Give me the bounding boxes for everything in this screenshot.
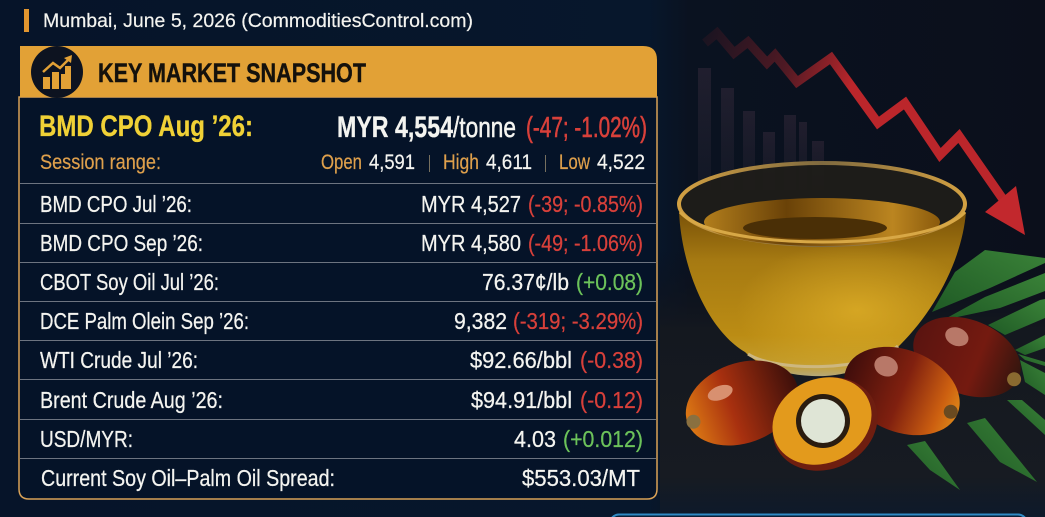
row: BMD CPO Aug '26 (39, 110, 647, 144)
row: USD/MYR: (+0.012) (563, 426, 643, 452)
accent bar (24, 9, 29, 32)
row: DCE Palm Olein: (-319; -3.29%) (513, 308, 643, 334)
row: BMD CPO Sep '26: (-49; -1.06%) (528, 230, 643, 256)
palm fruit: left (673, 346, 810, 461)
row: CBOT Soy Oil: CBOT Soy Oil Jul ’26: (40, 269, 219, 295)
row: CBOT Soy Oil (40, 269, 643, 295)
row: BMD CPO Jul '26: BMD CPO Jul ’26: (40, 191, 192, 217)
row: BMD CPO Jul '26: (-39; -0.85%) (528, 191, 643, 217)
row: Brent Crude: (-0.12) (580, 387, 643, 413)
palm fruit: back right (901, 302, 1036, 413)
row: session range: 4,591 (369, 150, 415, 174)
panel body (19, 97, 657, 499)
palm fruit: middle (831, 331, 973, 451)
row: session range: 4,522 (597, 150, 645, 174)
row: CBOT Soy Oil: (+0.08) (576, 269, 643, 295)
row: BMD CPO Aug '26: (-47; -1.02%) (526, 112, 647, 144)
row: session range: Session range: (40, 150, 161, 174)
next panel top edge (610, 514, 1027, 517)
row: soy oil-palm oil spread: $553.03/MT (522, 465, 640, 491)
row: USD/MYR (40, 426, 643, 452)
row: BMD CPO Jul '26 (40, 191, 643, 217)
row: session range: 4,611 (486, 150, 532, 174)
row: soy oil-palm oil spread (41, 465, 640, 491)
row: session range: Low (559, 150, 590, 174)
row: WTI Crude: (-0.38) (580, 347, 643, 373)
row: Brent Crude (40, 387, 643, 413)
row: BMD CPO Jul '26: MYR 4,527 (421, 191, 521, 217)
row: USD/MYR: USD/MYR: (40, 426, 133, 452)
heading: KEY MARKET SNAPSHOT (98, 58, 366, 88)
row: session range: High (443, 150, 479, 174)
row: session range: Open (321, 150, 362, 174)
row: DCE Palm Olein: 9,382 (454, 308, 507, 334)
row: WTI Crude (40, 347, 643, 373)
row: DCE Palm Olein (40, 308, 643, 334)
row: Brent Crude: $94.91/bbl (471, 387, 572, 413)
glass bowl (679, 163, 966, 376)
row: soy oil-palm oil spread: Current Soy Oil–Palm Oil Spread: (41, 465, 335, 491)
row: BMD CPO Sep '26: BMD CPO Sep ’26: (40, 230, 203, 256)
row: DCE Palm Olein: DCE Palm Olein Sep ’26: (40, 308, 249, 334)
palm leaves (907, 250, 1045, 490)
table surface (660, 250, 1045, 517)
palm fruit: cut half (757, 360, 893, 488)
icon: rising chart (31, 46, 83, 98)
red falling arrow (705, 33, 1025, 235)
row: session range (40, 150, 645, 174)
panel: key market snapshot (19, 46, 657, 499)
panel header (20, 46, 657, 97)
row: USD/MYR: 4.03 (514, 426, 556, 452)
row: BMD CPO Sep '26 (40, 230, 643, 256)
faded bar chart (698, 68, 824, 190)
row: WTI Crude: $92.66/bbl (470, 347, 572, 373)
illustration: palm oil bowl with falling chart (660, 33, 1045, 517)
row: Brent Crude: Brent Crude Aug ’26: (40, 387, 223, 413)
row: WTI Crude: WTI Crude Jul ’26: (40, 347, 198, 373)
dateline (24, 9, 473, 32)
row: BMD CPO Aug '26: /tonne (453, 112, 516, 144)
row: BMD CPO Sep '26: MYR 4,580 (421, 230, 521, 256)
row: BMD CPO Aug '26: BMD CPO Aug ’26: (39, 110, 253, 143)
row: BMD CPO Aug '26: MYR 4,554 (337, 111, 453, 144)
date text: Mumbai, June 5, 2026 (CommoditiesControl.com) (43, 10, 473, 32)
row: CBOT Soy Oil: 76.37¢/lb (482, 269, 569, 295)
